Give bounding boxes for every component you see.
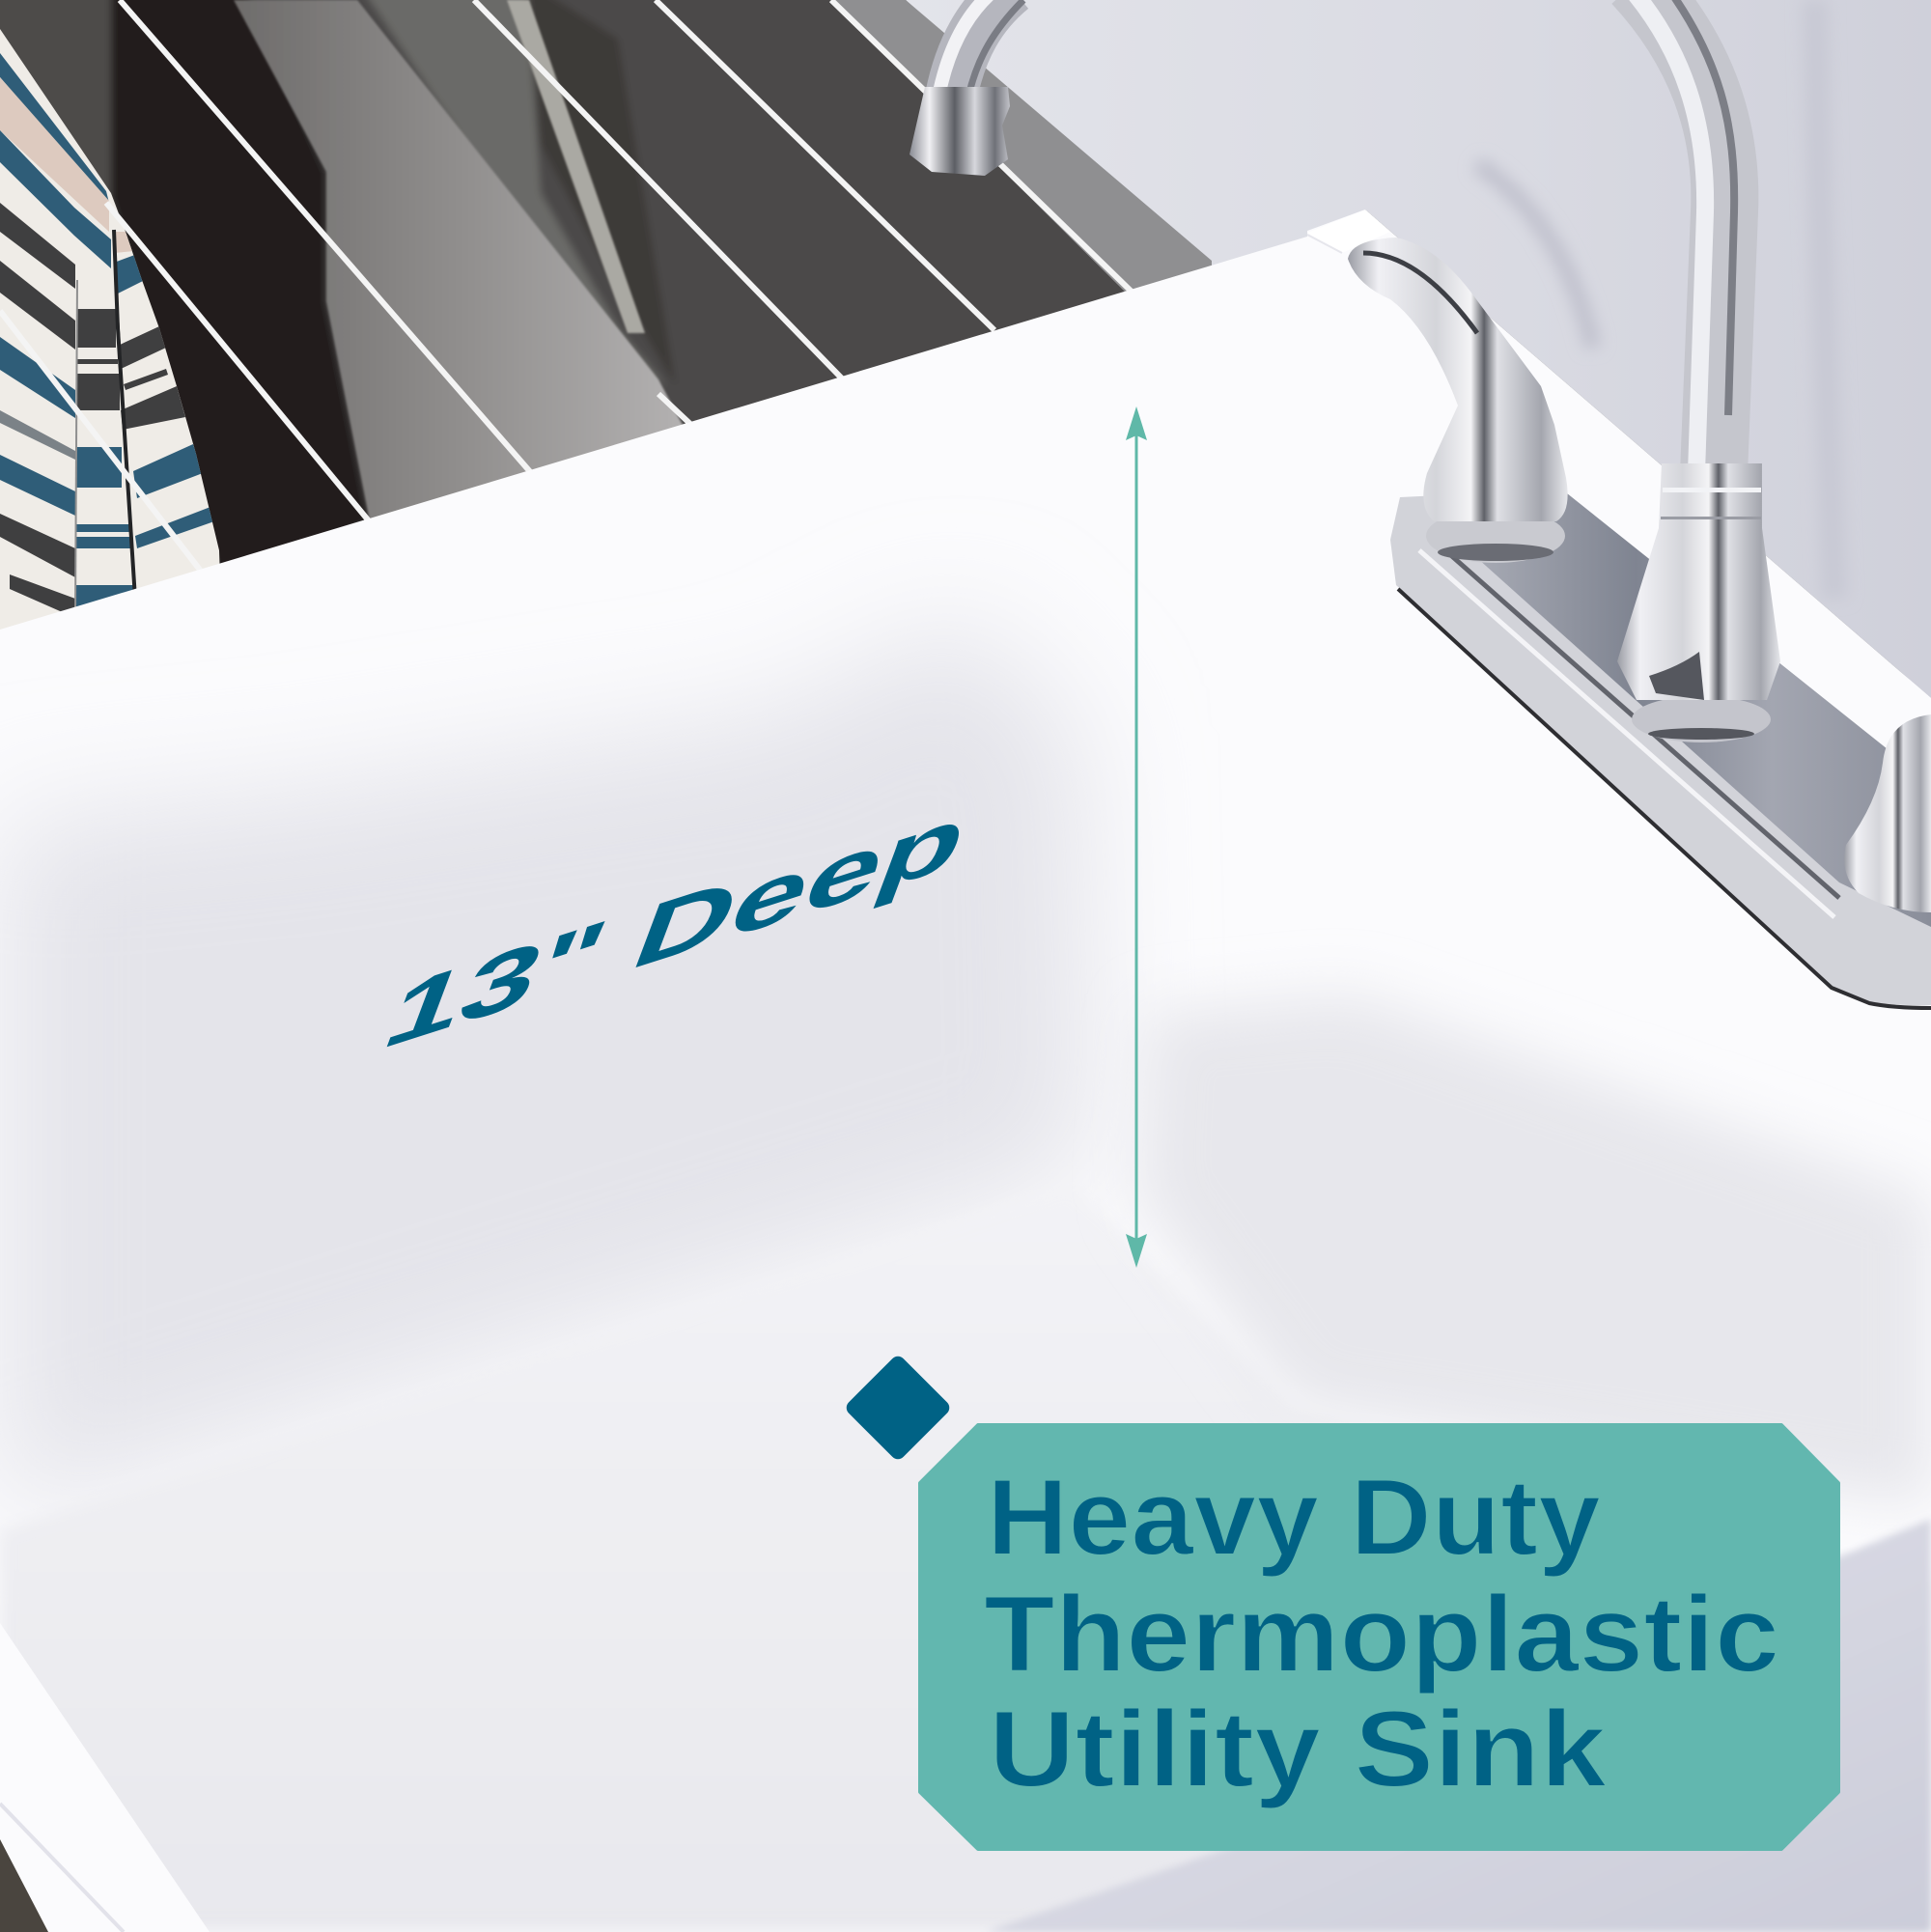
left fold stripes — [0, 53, 111, 618]
right fold stripes — [114, 232, 214, 548]
rim tip — [1365, 210, 1377, 220]
title: Heavy Duty Thermoplastic Utility Sink: Heavy Duty — [987, 1457, 1601, 1578]
left handle — [1426, 509, 1565, 563]
spout left end — [951, 0, 1012, 97]
rack wires — [0, 0, 1132, 574]
background: dark laundry room behind the sink — [0, 0, 1931, 676]
faucet — [910, 0, 1931, 1008]
wall — [906, 0, 1931, 698]
hanging cloth — [234, 0, 684, 521]
icon: diamond accent — [843, 1353, 953, 1463]
title panel — [920, 1425, 1838, 1849]
fold creases — [75, 280, 77, 618]
title: Heavy Duty Thermoplastic Utility Sink: Thermoplastic — [984, 1574, 1779, 1694]
middle fold stripes — [75, 309, 135, 608]
wall shadows — [1477, 0, 1834, 599]
depth label: 13" Deep — [371, 782, 984, 1070]
rack pole — [507, 0, 645, 333]
striped towel — [0, 29, 220, 630]
main stem — [1632, 696, 1771, 742]
title: Heavy Duty Thermoplastic Utility Sink: Utility Sink — [989, 1689, 1608, 1809]
counter band behind faucet — [831, 0, 1212, 304]
spout arch — [1637, 0, 1724, 473]
right handle — [1844, 714, 1931, 912]
deck plate — [1390, 490, 1931, 1005]
front lip — [0, 1623, 210, 1932]
depth arrow — [1126, 406, 1147, 1268]
